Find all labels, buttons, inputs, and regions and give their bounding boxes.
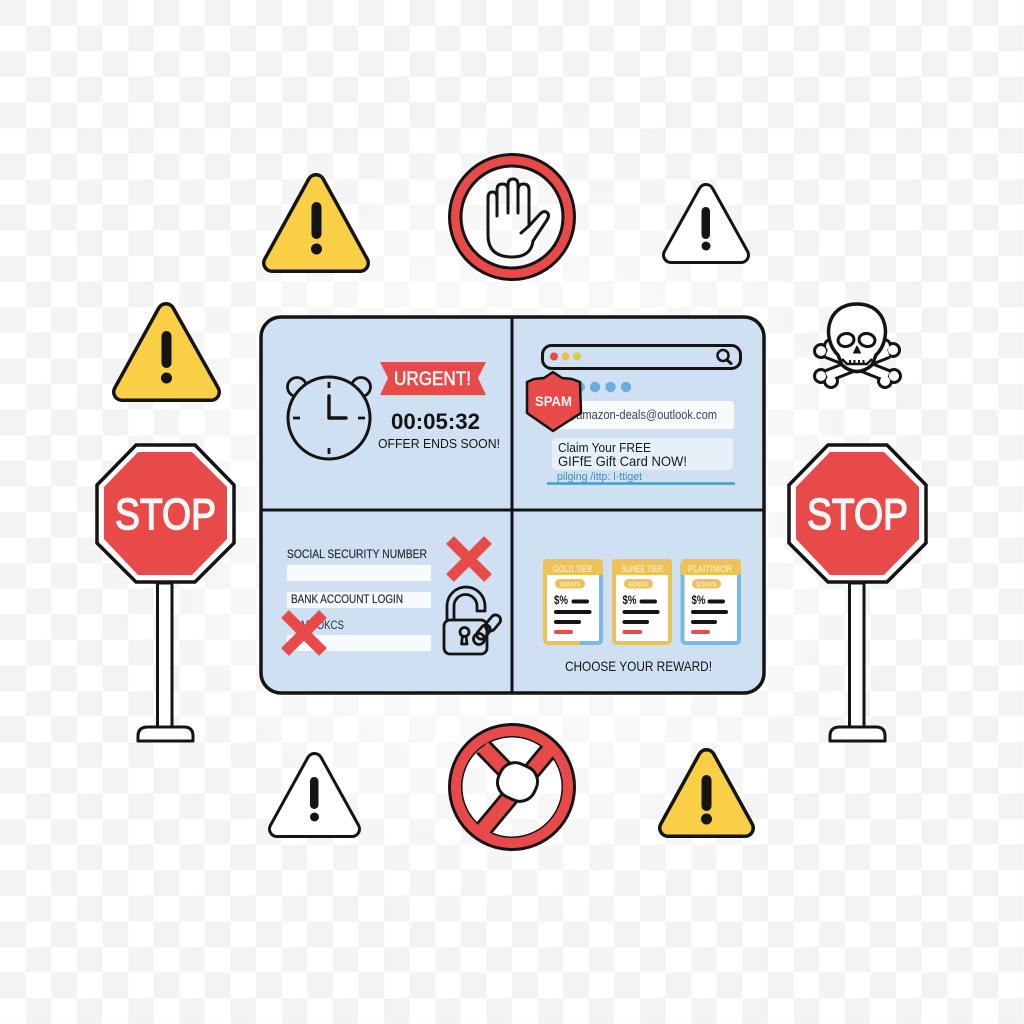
- reward caption: CHOOSE YOUR REWARD!: [565, 658, 712, 674]
- gold tier card: GOLD TIEB: [553, 564, 592, 574]
- panel: phishing email: [527, 346, 740, 484]
- obscured label: MOOKCS: [301, 620, 344, 632]
- icon: open padlock with chain: [444, 587, 503, 654]
- sign label: STOP: [807, 490, 908, 539]
- sign octagon: [97, 445, 234, 582]
- sender address field: [553, 401, 734, 429]
- icon: yellow warning triangle bottom right: [668, 758, 745, 828]
- icon: stop sign right: [789, 445, 926, 741]
- panel: reward tiers: [543, 559, 741, 674]
- gold tier card: $%: [554, 595, 568, 607]
- silver tier card: $%: [622, 595, 636, 607]
- silver tier card: SUNEE TIER: [621, 564, 663, 574]
- icon: white warning triangle top right: [671, 192, 741, 255]
- sign octagon: [789, 445, 926, 582]
- email message field: [552, 438, 733, 470]
- phishing link: pilging /ittp: l·ttiget: [557, 471, 642, 483]
- social security label: SOCIAL SECURITY NUMBER: [287, 549, 427, 561]
- red x top: [450, 540, 488, 578]
- sign pole: [158, 583, 172, 727]
- sign label: STOP: [115, 490, 216, 539]
- bank login label: BANK ACCOUNT LOGIN: [291, 594, 403, 606]
- spam shield badge: SPAM: [535, 393, 572, 409]
- browser address bar: [542, 346, 740, 368]
- countdown timer: 00:05:32: [391, 409, 480, 434]
- icon: stop sign left: [97, 445, 234, 741]
- spam shield badge: [527, 372, 581, 431]
- platinum tier card: PLAITINIOR: [688, 564, 732, 574]
- panel: four-part scam tactics board: [261, 317, 764, 693]
- panel: sensitive data form: [285, 540, 503, 654]
- gold tier card: [543, 559, 603, 643]
- icon: prohibited circle: [450, 724, 574, 850]
- urgent banner: [380, 362, 486, 395]
- platinum tier card: [681, 559, 741, 643]
- icon: yellow warning triangle left: [122, 312, 211, 392]
- silver tier card: [612, 559, 672, 643]
- icon: yellow warning triangle top left: [272, 183, 360, 263]
- blue page dots: [575, 382, 631, 392]
- sign pole: [850, 583, 864, 727]
- sender address field: @amazon-deals@outlook.com: [565, 408, 717, 422]
- email message field: GIFfE Gift Card NOW!: [558, 453, 687, 469]
- red x bottom: [285, 614, 323, 652]
- icon: stop hand in red circle: [450, 154, 574, 280]
- platinum tier card: BONUS: [696, 582, 716, 588]
- offer caption: OFFER ENDS SOON!: [378, 436, 500, 451]
- urgent banner: URGENT!: [394, 368, 471, 390]
- icon: skull and crossbones: [813, 304, 902, 389]
- icon: white warning triangle bottom left: [277, 761, 352, 829]
- sign base: [830, 727, 885, 741]
- panel: urgency countdown: [288, 362, 500, 459]
- email message field: Claim Your FREE: [558, 440, 651, 455]
- platinum tier card: $%: [692, 595, 706, 607]
- form fields: [287, 565, 431, 651]
- icon: alarm clock: [288, 377, 370, 459]
- silver tier card: BONUS: [628, 582, 648, 588]
- gold tier card: BONUS: [560, 582, 580, 588]
- sign base: [138, 727, 193, 741]
